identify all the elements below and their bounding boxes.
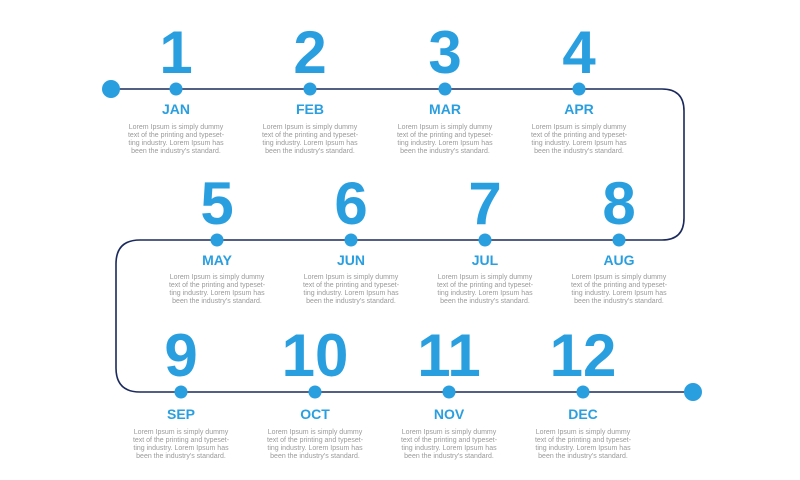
month: AUG bbox=[571, 170, 668, 305]
month: MAR: 3 bbox=[428, 19, 462, 86]
month: APR: 4 bbox=[562, 19, 596, 86]
month: OCT bbox=[267, 322, 364, 460]
month: AUG: AUG bbox=[603, 252, 635, 268]
start dot bbox=[102, 80, 120, 98]
month: NOV: 11 bbox=[417, 322, 481, 389]
month: JUL: been the industry's standard. bbox=[440, 298, 530, 305]
month: SEP: ting industry. Lorem Ipsum has bbox=[133, 445, 229, 452]
month: NOV: ting industry. Lorem Ipsum has bbox=[401, 445, 497, 452]
month: OCT: ting industry. Lorem Ipsum has bbox=[267, 445, 363, 452]
month: APR bbox=[531, 19, 628, 155]
month: NOV: text of the printing and typeset- bbox=[401, 437, 498, 444]
month: JUN: been the industry's standard. bbox=[306, 298, 396, 305]
month: JUN: 6 bbox=[334, 170, 368, 237]
month: JUL bbox=[437, 170, 534, 305]
month: NOV bbox=[401, 322, 498, 460]
month: SEP bbox=[133, 322, 230, 460]
month: JUN: text of the printing and typeset- bbox=[303, 282, 400, 289]
month: SEP: been the industry's standard. bbox=[136, 453, 226, 460]
month: FEB: been the industry's standard. bbox=[265, 148, 355, 155]
month: DEC: been the industry's standard. bbox=[538, 453, 628, 460]
month: MAR: text of the printing and typeset- bbox=[397, 132, 494, 139]
month: NOV: NOV bbox=[434, 406, 465, 422]
month: MAY: 5 bbox=[200, 170, 234, 237]
month: MAY: Lorem Ipsum is simply dummy bbox=[170, 274, 265, 281]
month: APR: been the industry's standard. bbox=[534, 148, 624, 155]
month: AUG: been the industry's standard. bbox=[574, 298, 664, 305]
month: MAR: Lorem Ipsum is simply dummy bbox=[398, 124, 493, 131]
month: APR: ting industry. Lorem Ipsum has bbox=[531, 140, 627, 147]
month: OCT: text of the printing and typeset- bbox=[267, 437, 364, 444]
month: JUL: ting industry. Lorem Ipsum has bbox=[437, 290, 533, 297]
month: DEC bbox=[535, 322, 632, 460]
month: MAY: MAY bbox=[202, 252, 233, 268]
month: OCT: 10 bbox=[282, 322, 348, 389]
month: SEP: text of the printing and typeset- bbox=[133, 437, 230, 444]
month: JUL: 7 bbox=[468, 170, 502, 237]
timeline path bbox=[111, 89, 693, 392]
month: FEB: text of the printing and typeset- bbox=[262, 132, 359, 139]
month: DEC: Lorem Ipsum is simply dummy bbox=[536, 429, 631, 436]
month: FEB: 2 bbox=[293, 19, 327, 86]
month: OCT: Lorem Ipsum is simply dummy bbox=[268, 429, 363, 436]
month: MAY bbox=[169, 170, 266, 305]
month: AUG: 8 bbox=[602, 170, 636, 237]
month: JUN: Lorem Ipsum is simply dummy bbox=[304, 274, 399, 281]
month: MAR: ting industry. Lorem Ipsum has bbox=[397, 140, 493, 147]
month: AUG: text of the printing and typeset- bbox=[571, 282, 668, 289]
month: MAY: text of the printing and typeset- bbox=[169, 282, 266, 289]
month: MAY: been the industry's standard. bbox=[172, 298, 262, 305]
month: JAN bbox=[128, 19, 225, 155]
month: MAR: been the industry's standard. bbox=[400, 148, 490, 155]
month: JUN bbox=[303, 170, 400, 305]
month: JUL: Lorem Ipsum is simply dummy bbox=[438, 274, 533, 281]
month: OCT: been the industry's standard. bbox=[270, 453, 360, 460]
month: JAN: 1 bbox=[159, 19, 193, 86]
month: JAN: ting industry. Lorem Ipsum has bbox=[128, 140, 224, 147]
month: APR: Lorem Ipsum is simply dummy bbox=[532, 124, 627, 131]
month: DEC: text of the printing and typeset- bbox=[535, 437, 632, 444]
month: NOV: Lorem Ipsum is simply dummy bbox=[402, 429, 497, 436]
month: SEP: Lorem Ipsum is simply dummy bbox=[134, 429, 229, 436]
month: JUL: JUL bbox=[472, 252, 499, 268]
month: JAN: JAN bbox=[162, 101, 190, 117]
month: JUL: text of the printing and typeset- bbox=[437, 282, 534, 289]
month: FEB: ting industry. Lorem Ipsum has bbox=[262, 140, 358, 147]
month: JAN: been the industry's standard. bbox=[131, 148, 221, 155]
month: AUG: Lorem Ipsum is simply dummy bbox=[572, 274, 667, 281]
month: JUN: JUN bbox=[337, 252, 365, 268]
month: APR: text of the printing and typeset- bbox=[531, 132, 628, 139]
month: MAR bbox=[397, 19, 494, 155]
month: JAN: text of the printing and typeset- bbox=[128, 132, 225, 139]
month: JAN: Lorem Ipsum is simply dummy bbox=[129, 124, 224, 131]
month: JUN: ting industry. Lorem Ipsum has bbox=[303, 290, 399, 297]
month: FEB: Lorem Ipsum is simply dummy bbox=[263, 124, 358, 131]
month: SEP: 9 bbox=[164, 322, 198, 389]
month: FEB bbox=[262, 19, 359, 155]
month: MAY: ting industry. Lorem Ipsum has bbox=[169, 290, 265, 297]
month: APR: APR bbox=[564, 101, 594, 117]
month: DEC: DEC bbox=[568, 406, 598, 422]
month: AUG: ting industry. Lorem Ipsum has bbox=[571, 290, 667, 297]
month: DEC: ting industry. Lorem Ipsum has bbox=[535, 445, 631, 452]
month: SEP: SEP bbox=[167, 406, 195, 422]
month: NOV: been the industry's standard. bbox=[404, 453, 494, 460]
month: DEC: 12 bbox=[550, 322, 616, 389]
month: MAR: MAR bbox=[429, 101, 461, 117]
month: OCT: OCT bbox=[300, 406, 330, 422]
month: FEB: FEB bbox=[296, 101, 324, 117]
end dot bbox=[684, 383, 702, 401]
